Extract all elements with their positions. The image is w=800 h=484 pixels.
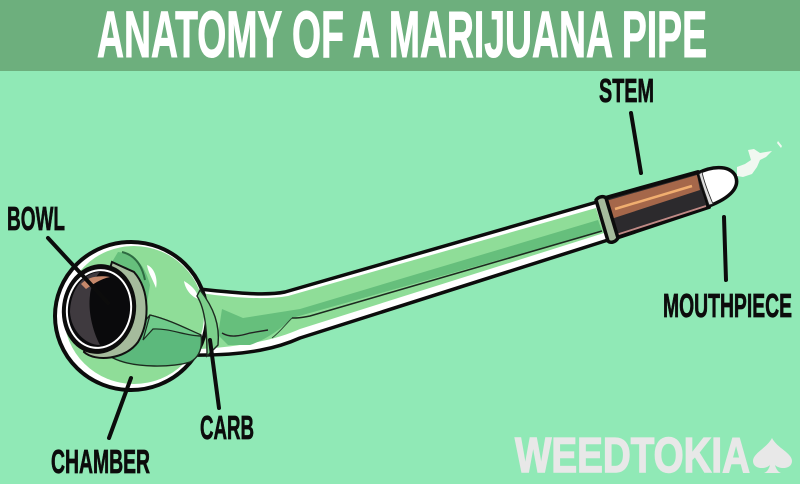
leader lines: [48, 113, 726, 438]
bowl opening: [56, 259, 147, 359]
label: stem: STEM: [599, 72, 654, 109]
label: chamber: CHAMBER: [51, 443, 150, 480]
pipe tube: [190, 202, 608, 355]
bulb chamber: [55, 242, 218, 390]
icon: marijuana pipe: [55, 141, 782, 390]
mouthpiece tip: [698, 168, 737, 206]
smoke: [737, 141, 782, 177]
icon: spade: [753, 438, 792, 473]
label: bowl: BOWL: [7, 200, 65, 237]
mouthpiece tube: [596, 172, 709, 242]
label: carb: CARB: [200, 409, 254, 446]
